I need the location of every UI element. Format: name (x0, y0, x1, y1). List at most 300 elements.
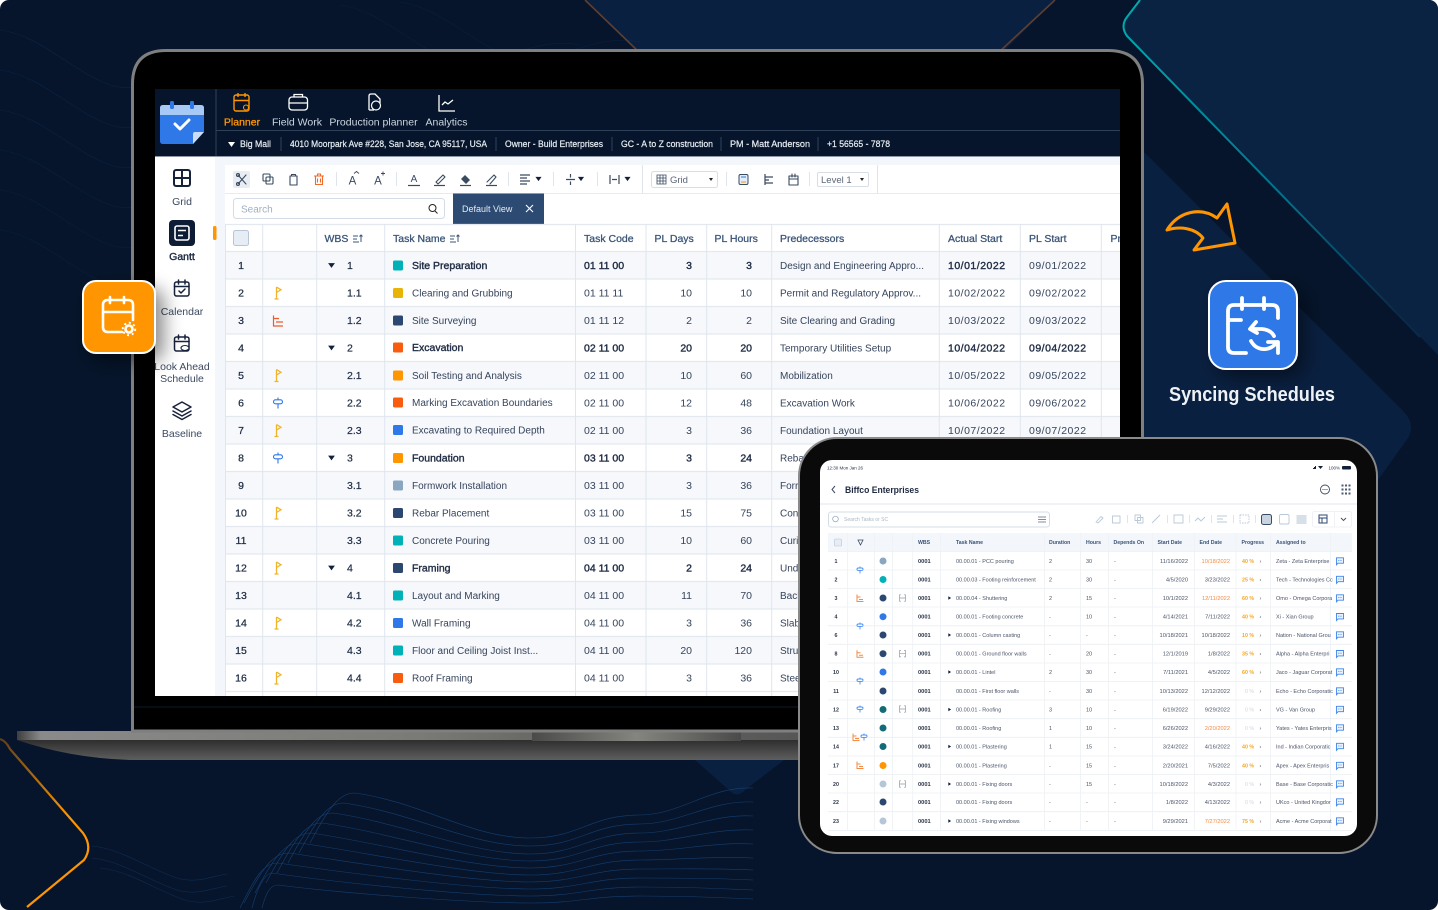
row 6: 12 (680, 398, 692, 410)
tablet row 3: 15 (1086, 596, 1092, 602)
tablet row 2: 00.00.03 - Footing reinforcement (956, 577, 1036, 583)
row 2: Clearing and Grubbing (412, 289, 513, 300)
tablet row 10: 4/5/2022 (1208, 670, 1230, 676)
tablet row 23: 0001 (918, 819, 931, 825)
row 4 (238, 342, 1087, 355)
row 16: 36 (740, 673, 752, 685)
arrow: curved orange pointer (1167, 204, 1235, 250)
tablet row 13: Yates - Yates Enterpris (1276, 726, 1332, 732)
row 10: 10 (235, 508, 247, 520)
tablet row 4: 00.00.01 - Footing concrete (956, 615, 1023, 621)
table header: WBS (324, 233, 348, 245)
row 9 (238, 480, 799, 492)
row 2: 1.1 (347, 288, 362, 300)
tablet row 23: 23 (833, 819, 839, 825)
row 11: 3.3 (347, 535, 362, 547)
tablet toolbar (1096, 512, 1352, 527)
row 9: 36 (740, 480, 752, 492)
icon: syncing schedules (1209, 281, 1297, 369)
tablet row 11: › (1260, 689, 1262, 695)
tablet row 8: - (1049, 652, 1051, 658)
tool: wrap (610, 175, 631, 184)
tablet row 2: 3/23/2022 (1205, 577, 1230, 583)
default view tab: Default View (462, 204, 513, 214)
row 4: 20 (680, 343, 692, 355)
tablet row 22: 1/8/2022 (1166, 800, 1188, 806)
level selector: Level 1 (821, 175, 852, 186)
tablet row 10: 30 (1086, 670, 1092, 676)
tool: text colour (408, 174, 420, 186)
row 4: 10/04/2022 (948, 343, 1006, 355)
tablet row 22: - (1049, 800, 1051, 806)
tablet row 14: 00.00.01 - Plastering (956, 744, 1007, 750)
row 13 (235, 590, 803, 602)
tablet row 3: 12/11/2022 (1202, 596, 1230, 602)
table (225, 224, 1122, 696)
tablet row 17: 15 (1086, 763, 1092, 769)
tablet row 4: Xi - Xian Group (1276, 615, 1314, 621)
row 14: Wall Framing (412, 619, 471, 630)
row 5: 10/05/2022 (948, 370, 1006, 382)
tablet row 20: - (1049, 782, 1051, 788)
row 1: 1 (238, 260, 244, 272)
row 13: Layout and Marking (412, 591, 500, 602)
tablet table header: WBS (918, 540, 931, 546)
row 8: Foundation (412, 453, 465, 465)
row 15: 4.3 (347, 645, 362, 657)
tablet row 13: 1 (1049, 726, 1052, 732)
project info row: GC - A to Z construction (621, 139, 713, 149)
tablet row 3: Omo - Omega Corpora (1276, 596, 1333, 602)
row 5: 5 (238, 370, 244, 382)
row 4: Excavation (412, 342, 464, 354)
row 13: 4.1 (347, 590, 362, 602)
tablet row 14: - (1114, 744, 1116, 750)
tablet row 11: 30 (1086, 689, 1092, 695)
tablet row 6: › (1260, 633, 1262, 639)
tablet row 22: 4/13/2022 (1205, 800, 1230, 806)
row 1 (238, 260, 1087, 272)
tablet row 10: › (1260, 670, 1262, 676)
tablet row 12: 0001 (918, 707, 931, 713)
row 5: 2.1 (347, 370, 362, 382)
row 1: Design and Engineering Appro... (780, 261, 924, 272)
nav: Field Work: Field Work (272, 116, 323, 128)
row 6: Excavation Work (780, 399, 856, 410)
project info row: Owner - Build Enterprises (505, 139, 603, 149)
tablet row 2: Tech - Technologies Cc (1276, 577, 1333, 583)
tablet row 11: 00.00.01 - First floor walls (956, 689, 1019, 695)
tablet row 8: 1/8/2022 (1208, 652, 1230, 658)
grid selector (652, 172, 718, 188)
row 11: 03 11 00 (584, 535, 624, 547)
row 8 (238, 452, 804, 465)
tablet row 11: Echo - Echo Corporatic (1276, 689, 1333, 695)
tablet row 13 (833, 724, 1344, 732)
laptop (17, 50, 1142, 760)
tool: align (520, 175, 542, 184)
tablet row 11: 12/12/2022 (1202, 689, 1230, 695)
row 6: 10/06/2022 (948, 398, 1006, 410)
row 8: 3 (347, 453, 353, 465)
sidebar item: Calendar: Calendar (161, 306, 204, 318)
row 5: Soil Testing and Analysis (412, 371, 522, 382)
tablet row 13: 0001 (918, 726, 931, 732)
tablet row 12: › (1260, 707, 1262, 713)
tool: paste (290, 174, 297, 185)
row 3: 2 (686, 315, 692, 327)
row 12: 24 (740, 563, 752, 575)
row 2: 2 (238, 288, 244, 300)
nav: Planner (224, 93, 261, 128)
tablet row 1: 1 (835, 559, 838, 565)
row 14: 3 (686, 618, 692, 630)
row 1: 3 (686, 260, 692, 272)
tablet row 20: 4/3/2022 (1208, 782, 1230, 788)
tablet row 17: - (1114, 763, 1116, 769)
row 7: Excavating to Required Depth (412, 426, 545, 437)
table header: PL Hours (714, 233, 758, 245)
row 14: Slab (780, 619, 800, 630)
tablet row 20: 20 (833, 782, 839, 788)
sidebar item: Look Ahead Schedule (154, 335, 210, 385)
tablet row 1: 11/16/2022 (1160, 559, 1188, 565)
tablet table header: Start Date (1158, 540, 1182, 546)
tablet row 4: › (1260, 615, 1262, 621)
nav: Field Work (272, 94, 323, 128)
sidebar item: Gantt: Gantt (169, 251, 195, 263)
tablet row 20: 10/18/2022 (1160, 782, 1188, 788)
tablet row 10: 00.00.01 - Lintel (956, 670, 995, 676)
row 12: 12 (235, 563, 247, 575)
tablet row 22: › (1260, 800, 1262, 806)
tablet table header: Duration (1049, 540, 1070, 546)
tablet table header: End Date (1200, 540, 1222, 546)
tablet row 4: 4/14/2021 (1163, 615, 1188, 621)
tool: highlight (434, 175, 445, 186)
tablet row 4 (835, 613, 1344, 621)
tablet row 2: › (1260, 577, 1262, 583)
row 7: 10/07/2022 (948, 425, 1006, 437)
project info row: +1 56565 - 7878 (827, 139, 890, 149)
tablet row 20: Base - Base Corporatic (1276, 782, 1333, 788)
icon: app logo calendar (160, 101, 204, 144)
sidebar item: Gantt (169, 220, 195, 263)
tablet row 3: 10/1/2022 (1163, 596, 1188, 602)
app screen (154, 89, 1122, 696)
tablet row 14: 1 (1049, 744, 1052, 750)
tablet row 1: 00.00.01 - PCC pouring (956, 559, 1014, 565)
row 12: Und (780, 564, 798, 575)
toolbar (215, 157, 1120, 194)
sidebar item: Grid (172, 170, 192, 208)
row 5: Mobilization (780, 371, 833, 382)
tablet row 1: 2 (1049, 559, 1052, 565)
tablet row 14: 15 (1086, 744, 1092, 750)
tablet row 23: 9/29/2021 (1163, 819, 1188, 825)
tablet row 10: 10 (833, 670, 839, 676)
tablet row 12: VG - Van Group (1276, 707, 1315, 713)
table header: PL Days (654, 233, 694, 245)
row 9: 03 11 00 (584, 480, 624, 492)
tool: decrease font: A (349, 176, 357, 188)
tablet row 12: 0 % (1245, 707, 1254, 713)
tablet title bar (820, 485, 1357, 505)
tablet table header: Progress (1242, 540, 1264, 546)
row 4: Temporary Utilities Setup (780, 344, 892, 355)
table header: Task Name (393, 233, 446, 245)
tablet row 14: 40 % (1242, 744, 1254, 750)
row 8: 3 (686, 453, 692, 465)
row 15: Stru (780, 646, 798, 657)
row 11: Concrete Pouring (412, 536, 490, 547)
status bar: 100% (1328, 466, 1340, 470)
row 5: 09/05/2022 (1029, 370, 1087, 382)
orange calendar settings badge (83, 281, 155, 353)
tablet row 11: - (1049, 689, 1051, 695)
nav: Planner: Planner (224, 116, 261, 128)
row 6: 6 (238, 398, 244, 410)
tablet row 4: 0001 (918, 615, 931, 621)
project info row: Big Mall (240, 139, 271, 149)
row 2: 10/02/2022 (948, 288, 1006, 300)
tablet row 2: 2 (835, 577, 838, 583)
tablet row 3 (835, 594, 1344, 602)
row 3: 3 (238, 315, 244, 327)
tablet row 8: 20 (1086, 652, 1092, 658)
row 6: 09/06/2022 (1029, 398, 1087, 410)
row 9: 9 (238, 480, 244, 492)
tablet row 8: › (1260, 652, 1262, 658)
row 14: 04 11 00 (584, 618, 624, 630)
tablet row 4: - (1049, 615, 1051, 621)
row 12: Framing (412, 563, 451, 575)
tablet row 17: › (1260, 763, 1262, 769)
tablet row 3: 0001 (918, 596, 931, 602)
tablet table header: Assigned to (1276, 540, 1306, 546)
tablet row 11 (833, 688, 1344, 695)
row 12: 2 (686, 563, 692, 575)
row 6 (238, 398, 1087, 410)
tool: calendar sync (789, 174, 798, 185)
tablet row 13: 10 (1086, 726, 1092, 732)
tablet row 23: 00.00.01 - Fixing windows (956, 819, 1020, 825)
tablet row 4: 40 % (1242, 615, 1254, 621)
row 14: 4.2 (347, 618, 362, 630)
row 10: Con (780, 509, 798, 520)
row 5 (238, 370, 1087, 382)
row 12: 4 (347, 563, 353, 575)
tablet row 22: 22 (833, 800, 839, 806)
row 14: 36 (740, 618, 752, 630)
tablet row 6: 0001 (918, 633, 931, 639)
tablet row 8 (835, 650, 1344, 658)
row 16 (235, 672, 801, 685)
row 13: 11 (681, 590, 692, 602)
tablet row 17: - (1049, 763, 1051, 769)
tablet row 6: - (1114, 633, 1116, 639)
tablet row 12 (833, 706, 1344, 713)
row 1: 10/01/2022 (948, 260, 1006, 272)
row 16: 16 (235, 673, 247, 685)
tablet row 8: 35 % (1242, 652, 1254, 658)
row 9: 3 (686, 480, 692, 492)
laptop base (17, 731, 1100, 760)
row 11: 60 (740, 535, 752, 547)
tablet table (828, 533, 1352, 830)
tool: gantt (765, 174, 773, 185)
tablet screen (820, 460, 1357, 836)
sidebar (154, 157, 225, 696)
row 8: 03 11 00 (584, 453, 624, 465)
row 16: 4.4 (347, 673, 362, 685)
sidebar item: Calendar (161, 280, 204, 318)
laptop bezel (132, 50, 1142, 731)
tablet row 11: 0 % (1245, 689, 1254, 695)
row 1: 01 11 00 (584, 260, 624, 272)
sidebar item: Baseline: Baseline (162, 428, 202, 440)
tablet row 14: › (1260, 744, 1262, 750)
row 15 (235, 645, 798, 657)
row 3 (238, 315, 1087, 327)
tablet row 14: 0001 (918, 744, 931, 750)
tablet row 3: 60 % (1242, 596, 1254, 602)
tablet row 20: 15 (1086, 782, 1092, 788)
tablet row 6: 10/18/2022 (1202, 633, 1230, 639)
tablet row 14: Ind - Indian Corporatic (1276, 744, 1331, 750)
tablet row 22: 0 % (1245, 800, 1254, 806)
tablet row 6: - (1049, 633, 1051, 639)
tablet table header: Depends On (1114, 540, 1144, 546)
nav: Production planner: Production planner (329, 116, 418, 128)
heading: Syncing Schedules: Syncing Schedules (1169, 384, 1335, 406)
row 2 (238, 287, 1087, 300)
table header: Actual Start (948, 233, 1002, 245)
tablet row 10 (833, 668, 1344, 676)
tablet row 4: - (1114, 615, 1116, 621)
tablet row 22: 00.00.01 - Fixing doors (956, 800, 1013, 806)
tablet row 2: 0001 (918, 577, 931, 583)
tablet (799, 438, 1377, 853)
tool: sign (486, 175, 497, 186)
tablet row 2: 30 (1086, 577, 1092, 583)
tablet row 6: - (1086, 633, 1088, 639)
sidebar item: Grid: Grid (172, 196, 192, 208)
row 9: 3.1 (347, 480, 362, 492)
tablet row 2: 4/5/2020 (1166, 577, 1188, 583)
row 4: 2 (347, 343, 353, 355)
tablet row 17: 0001 (918, 763, 931, 769)
row 10: 15 (680, 508, 692, 520)
row 10: 3.2 (347, 508, 362, 520)
tool: decrease font (348, 171, 360, 184)
search box: Search (241, 204, 273, 216)
table header: Predecessors (780, 233, 844, 245)
tablet row 3: 00.00.04 - Shuttering (956, 596, 1007, 602)
row stripes (225, 252, 1120, 664)
row 3: 09/03/2022 (1029, 315, 1087, 327)
row 1: 3 (746, 260, 752, 272)
tablet row 11: 0001 (918, 689, 931, 695)
tablet row 2: - (1114, 577, 1116, 583)
row 8: 24 (740, 453, 752, 465)
row 7: 09/07/2022 (1029, 425, 1087, 437)
row 16: Stee (780, 674, 801, 685)
row 5: 10 (680, 370, 692, 382)
tablet row 6: Nation - National Grou (1276, 633, 1331, 639)
tablet row 3: 3 (835, 596, 838, 602)
tablet row 12: 3 (1049, 707, 1052, 713)
project info row: PM - Matt Anderson (730, 139, 810, 149)
tablet row 23: 7/27/2022 (1205, 819, 1230, 825)
search box (234, 198, 444, 218)
tablet row 20: 0001 (918, 782, 931, 788)
row 12: 04 11 00 (584, 563, 624, 575)
tablet row 14: 4/16/2022 (1205, 744, 1230, 750)
row 11: 11 (236, 535, 247, 547)
tablet table header: Hours (1086, 540, 1101, 546)
row 15: 15 (235, 645, 247, 657)
row 5: 02 11 00 (584, 370, 624, 382)
tablet row 8: - (1114, 652, 1116, 658)
tablet row 12: 00.00.01 - Roofing (956, 707, 1001, 713)
row 11 (236, 535, 798, 547)
tablet row 1 (835, 558, 1344, 565)
row 11: 10 (680, 535, 692, 547)
tablet row 23: 75 % (1242, 819, 1254, 825)
tablet row 14 (833, 743, 1344, 750)
tablet row 1: 10/18/2022 (1202, 559, 1230, 565)
project info row (228, 137, 890, 151)
tool: copy (263, 174, 273, 184)
row 4: 20 (740, 343, 752, 355)
row 2: 01 11 11 (584, 288, 623, 300)
tablet row 6: 10 % (1242, 633, 1254, 639)
tablet row 20: 0 % (1245, 782, 1254, 788)
tablet row 10: 60 % (1242, 670, 1254, 676)
row 6: 2.2 (347, 398, 362, 410)
row 10 (235, 507, 798, 520)
row 7 (238, 424, 1087, 437)
row 2: 10 (740, 288, 752, 300)
table header: Task Code (584, 233, 634, 245)
tablet row 1: 0001 (918, 559, 931, 565)
tablet row 10: Jaco - Jaguar Corporat (1276, 670, 1333, 676)
tablet row 17: 7/5/2022 (1208, 763, 1230, 769)
row 7: 7 (238, 425, 244, 437)
tablet row 11: 10/13/2022 (1160, 689, 1188, 695)
row 9: Forr (780, 481, 799, 492)
row 9: Formwork Installation (412, 481, 507, 492)
row 12 (235, 562, 798, 575)
tablet row 13: 0 % (1245, 726, 1254, 732)
tablet row 12: 6/19/2022 (1163, 707, 1188, 713)
tablet row 23: › (1260, 819, 1262, 825)
row 13: 70 (740, 590, 752, 602)
tablet row 8: 8 (835, 652, 838, 658)
tablet row 8: 0001 (918, 652, 931, 658)
tablet row 22: - (1114, 800, 1116, 806)
tablet row 3: - (1114, 596, 1116, 602)
tablet row 11: 11 (833, 689, 839, 695)
tablet row 17: 40 % (1242, 763, 1254, 769)
tablet row 2 (835, 576, 1344, 583)
row 3: 01 11 12 (584, 315, 624, 327)
tablet search box: Search Tasks or SC (844, 517, 888, 523)
tablet row 22: UKco - United Kingdor (1276, 800, 1331, 806)
tablet row 3: 2 (1049, 596, 1052, 602)
row 10: 03 11 00 (584, 508, 624, 520)
